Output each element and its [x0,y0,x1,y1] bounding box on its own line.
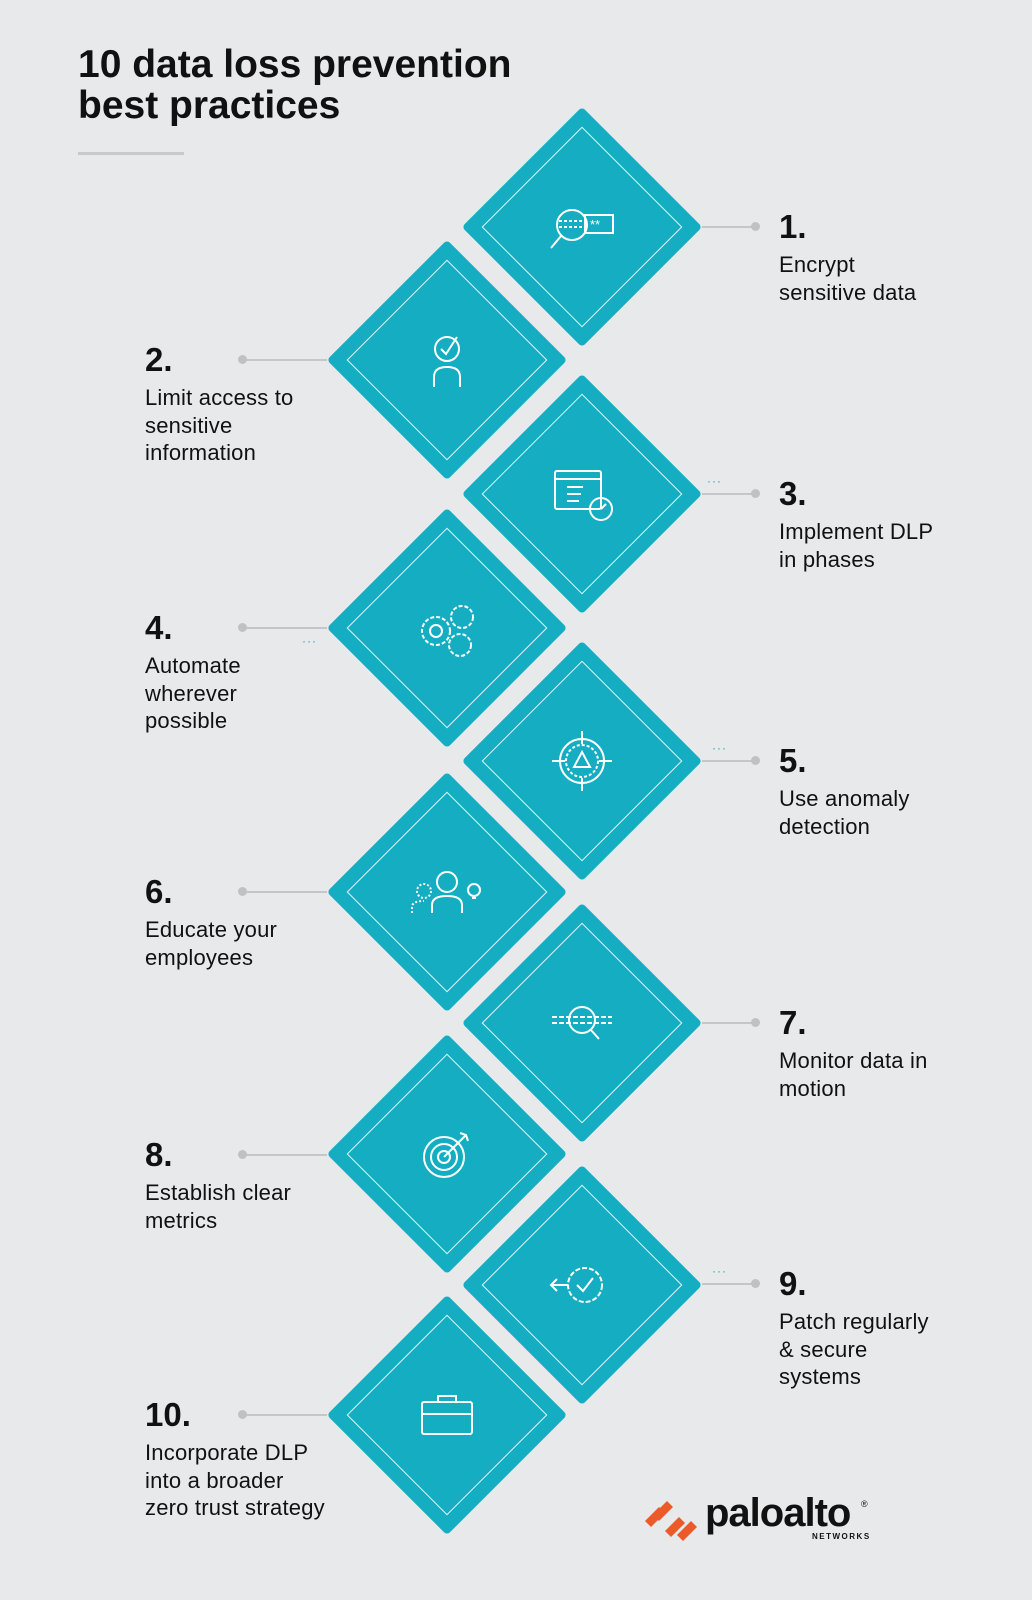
text: into a broader [145,1468,284,1492]
title: 10 data loss prevention [78,43,511,86]
logo [645,1491,871,1541]
text: Limit access to [145,385,294,410]
text: 2. [145,341,173,378]
text: 9. [779,1265,807,1302]
text: & secure [779,1336,867,1362]
text: sensitive data [779,280,916,304]
diamond 6 [327,772,567,1012]
icon: briefcase [421,1395,473,1435]
item 9 [702,1264,929,1389]
item 10 [145,1396,327,1520]
icon: target alert [552,731,612,791]
diamond 7 [462,903,702,1143]
icon: patch gear [550,1267,603,1303]
diamond 1 [462,107,702,347]
text: metrics [145,1208,217,1232]
diamond 9 [462,1165,702,1405]
diamond 3 [462,374,702,614]
text: 4. [145,609,173,646]
text: Monitor data in [779,1048,928,1073]
diamond 10 [327,1295,567,1535]
text: Implement DLP [779,519,933,544]
text: information [145,440,256,465]
text: employees [145,944,253,970]
text: in phases [779,546,875,572]
text: 8. [145,1136,173,1173]
icon: encrypt [550,209,614,249]
text: Patch regularly [779,1309,929,1334]
text: Establish clear [145,1180,291,1205]
icon: user check [433,336,461,387]
text: detection [779,814,870,838]
text: 10. [145,1396,191,1433]
text: Educate your [145,917,277,942]
diamond 8 [327,1034,567,1274]
icon: encrypt: ** [590,217,600,232]
text: possible [145,708,227,733]
text: 5. [779,742,807,779]
icon: monitor [552,1006,612,1040]
icon: educate [411,871,481,913]
text: ··· [707,474,722,488]
text: wherever [145,680,237,706]
item 4 [145,609,327,733]
text: ··· [302,634,317,648]
text: 7. [779,1004,807,1041]
title: best practices [78,84,340,127]
item 5 [702,741,910,838]
text: Automate [145,653,241,678]
title [78,43,511,127]
text: ··· [712,1264,727,1278]
diamond 5 [462,641,702,881]
icon: checklist gauge [554,470,613,521]
item 8 [145,1136,327,1232]
text: sensitive [145,412,232,438]
diamond 2 [327,240,567,480]
item 3 [702,474,933,572]
item 6 [145,873,327,970]
text: motion [779,1076,846,1100]
text: ··· [712,741,727,755]
icon: target arrow [423,1132,469,1178]
logo: paloalto [705,1491,850,1535]
text: 3. [779,475,807,512]
icon: gears [421,605,474,657]
text: Use anomaly [779,786,910,811]
text: Incorporate DLP [145,1440,308,1465]
diamond 4 [327,508,567,748]
item 1 [702,208,916,304]
text: Encrypt [779,252,855,277]
logo: ® [861,1499,868,1509]
item 2 [145,341,327,465]
text: systems [779,1364,861,1389]
logo: NETWORKS [812,1532,871,1541]
text: 1. [779,208,807,245]
text: 6. [145,873,173,910]
text: zero trust strategy [145,1495,325,1520]
item 7 [702,1004,928,1100]
